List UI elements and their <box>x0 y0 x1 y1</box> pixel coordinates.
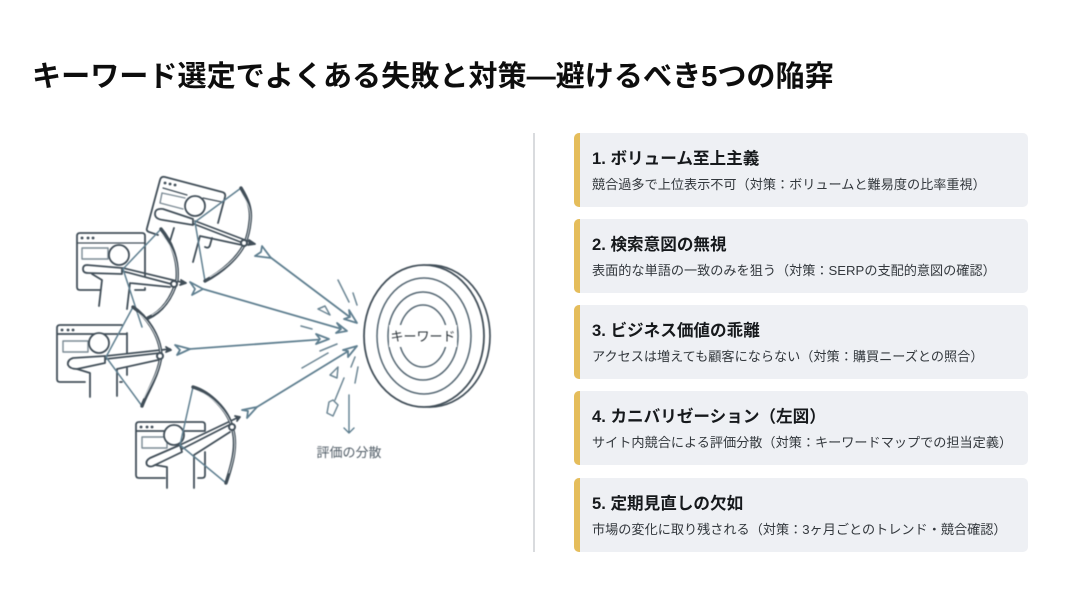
label: keyword: キーワード <box>390 329 456 344</box>
heading: pitfall 4: 4. カニバリゼーション（左図） <box>592 407 826 426</box>
arrows: flying toward target <box>175 246 357 418</box>
icon: archer third <box>57 307 171 406</box>
text: pitfall 3 detail: アクセスは増えても顧客にならない（対策：購買ニーズとの照合） <box>592 349 983 364</box>
illustration: archers aiming at one keyword target <box>55 175 492 490</box>
heading: pitfall 2: 2. 検索意図の無視 <box>592 235 727 254</box>
panel: pitfall 4 <box>574 391 1028 465</box>
heading: pitfall 1: 1. ボリューム至上主義 <box>592 149 759 168</box>
impact marks and deflected arrow pieces <box>301 280 358 416</box>
icon: archer second <box>77 229 186 327</box>
text: pitfall 1 detail: 競合過多で上位表示不可（対策：ボリュームと難易度の比率重視） <box>592 177 986 192</box>
icon: archer bottom <box>136 387 240 488</box>
label: evaluation split: 評価の分散 <box>316 445 382 460</box>
target: keyword <box>364 265 490 407</box>
icon: archer top <box>147 177 255 281</box>
heading: pitfall 5: 5. 定期見直しの欠如 <box>592 494 743 513</box>
title: キーワード選定でよくある失敗と対策—避けるべき5つの陥穽 <box>32 61 834 93</box>
panel: pitfall 1 <box>574 133 1028 207</box>
panel: pitfall 3 <box>574 305 1028 379</box>
panel: pitfall 5 <box>574 478 1028 552</box>
text: pitfall 4 detail: サイト内競合による評価分散（対策：キーワードマップでの担当定義） <box>592 435 1012 450</box>
text: pitfall 5 detail: 市場の変化に取り残される（対策：3ヶ月ごとのトレンド・競合確認） <box>592 522 1007 537</box>
heading: pitfall 3: 3. ビジネス価値の乖離 <box>592 321 760 340</box>
panel: pitfall 2 <box>574 219 1028 293</box>
text: pitfall 2 detail: 表面的な単語の一致のみを狙う（対策：SERPの支配的意図の確認） <box>592 263 996 278</box>
arrow: down to evaluation split <box>344 395 354 433</box>
